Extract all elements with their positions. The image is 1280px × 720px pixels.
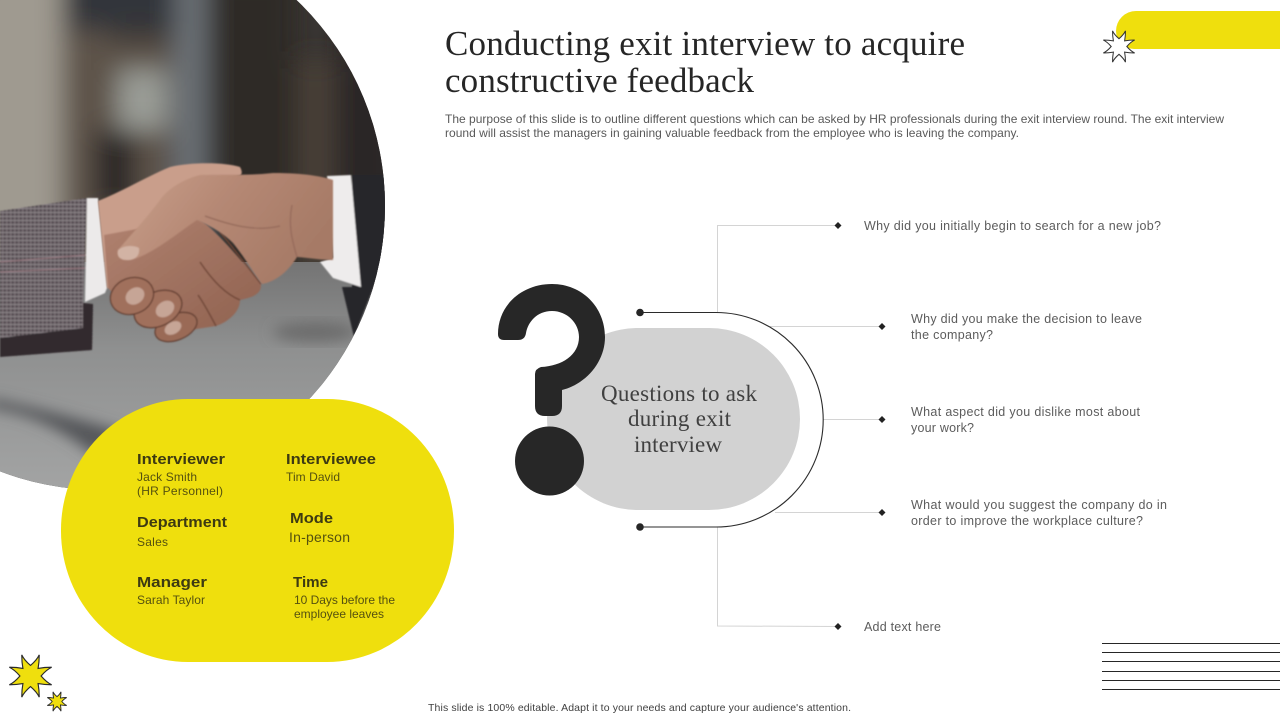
question 1: Why did you initially begin to search for a new job? — [864, 219, 1161, 233]
question 4: What would you suggest the company do in — [911, 498, 1167, 512]
decorative lines bottom right — [1102, 644, 1280, 690]
arc connector — [636, 309, 823, 531]
question 4: order to improve the workplace culture? — [911, 514, 1143, 528]
field: time — [293, 574, 395, 621]
right hand — [118, 173, 333, 284]
grey pill — [547, 328, 800, 510]
decorative yellow bar top right — [1116, 11, 1280, 49]
center label: Questions to ask — [601, 381, 758, 406]
question 2: the company? — [911, 328, 993, 342]
title: Conducting exit interview to acquire — [445, 24, 965, 63]
question 2 — [878, 312, 1142, 342]
field: interviewer: Jack Smith — [137, 470, 197, 484]
question 3 — [878, 405, 1141, 435]
center label — [601, 381, 758, 457]
field: interviewer: (HR Personnel) — [137, 484, 223, 498]
center label: during exit — [628, 406, 732, 431]
footer note: This slide is 100% editable. Adapt it to your needs and capture your audience's attention. — [428, 702, 851, 714]
icon: white star — [1103, 31, 1135, 62]
field: manager: Manager — [137, 574, 207, 591]
left sleeve — [0, 198, 107, 357]
field: time: employee leaves — [294, 607, 384, 621]
question 3: your work? — [911, 421, 974, 435]
field: interviewee — [286, 451, 376, 484]
question 4 — [878, 498, 1167, 528]
field: department: Sales — [137, 535, 168, 549]
question 3: What aspect did you dislike most about — [911, 405, 1141, 419]
center label: interview — [634, 432, 722, 457]
right sleeve — [320, 175, 392, 337]
field: interviewee: Interviewee — [286, 451, 376, 468]
field: department — [137, 514, 227, 549]
field: mode: Mode — [290, 510, 333, 527]
field: time: Time — [293, 574, 328, 591]
field: interviewer: Interviewer — [137, 451, 225, 468]
connector lines — [718, 226, 882, 626]
fingers — [109, 276, 198, 343]
field: time: 10 Days before the — [294, 593, 395, 607]
field: manager: Sarah Taylor — [137, 593, 205, 607]
description text — [445, 112, 1224, 140]
description text: round will assist the managers in gaining valuable feedback from the employee who is leaving the company. — [445, 126, 1019, 140]
title — [445, 24, 965, 100]
icon: question mark — [498, 284, 605, 496]
field: manager — [137, 574, 207, 607]
photo: handshake in circle — [0, 0, 404, 512]
field: interviewer — [137, 451, 225, 498]
yellow info panel — [61, 399, 454, 662]
left hand back — [98, 163, 261, 330]
question 2: Why did you make the decision to leave — [911, 312, 1142, 326]
question 5: Add text here — [864, 620, 941, 634]
icon: yellow stars — [9, 655, 67, 711]
field: interviewee: Tim David — [286, 470, 340, 484]
field: mode: In-person — [289, 529, 350, 545]
description text: The purpose of this slide is to outline different questions which can be asked by HR professionals during the exit interview round. The exit interview — [445, 112, 1224, 126]
title: constructive feedback — [445, 61, 754, 100]
field: department: Department — [137, 514, 227, 531]
field: mode — [289, 510, 350, 545]
